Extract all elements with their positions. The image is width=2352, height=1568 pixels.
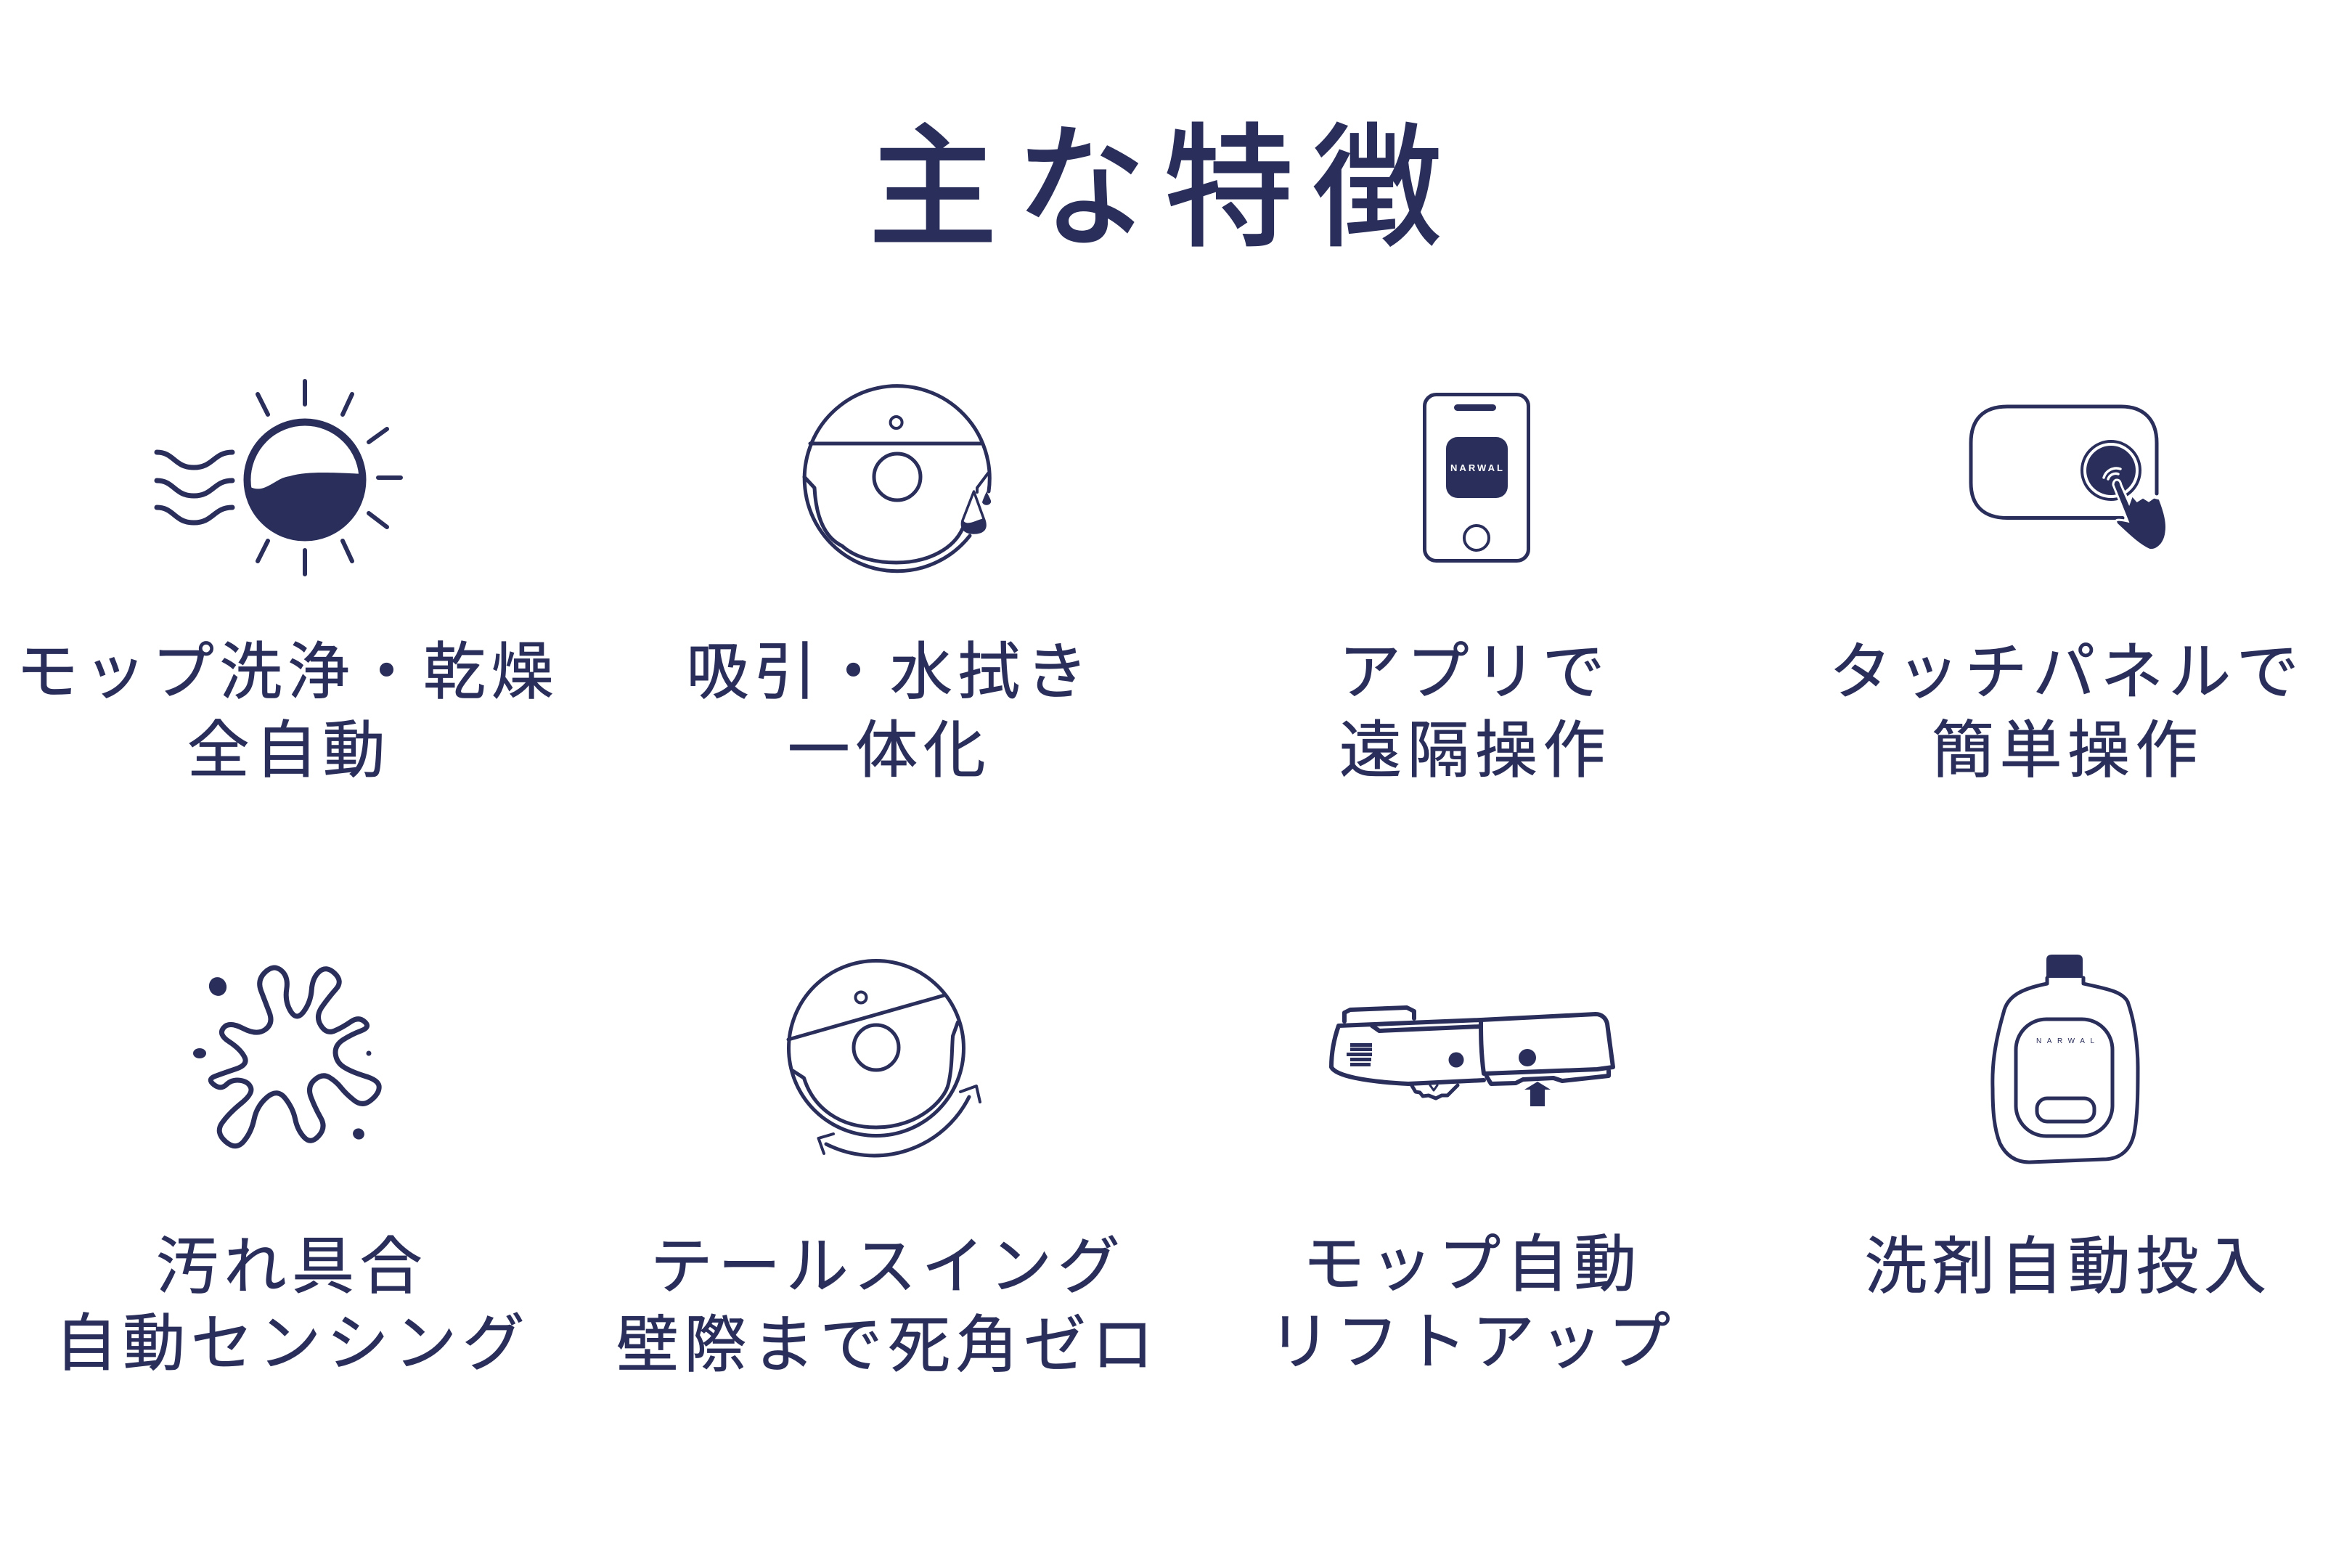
label: app control: アプリで (1339, 637, 1610, 707)
panel: mop lift (1269, 1008, 1675, 1377)
label: mop lift: リフトアップ (1269, 1307, 1675, 1377)
icon: robot with swing arrow (788, 961, 980, 1156)
label: touch panel: 簡単操作 (1932, 716, 2203, 785)
panel: auto detergent (1864, 955, 2272, 1302)
label: mop wash and dry (16, 637, 559, 785)
label: mop wash and dry: 全自動 (187, 716, 391, 785)
label: dirt sensing (55, 1232, 530, 1379)
label: suction and mopping: 一体化 (788, 716, 991, 785)
label: app control (1339, 637, 1611, 785)
icon: detergent bottle: NARWAL (2036, 1037, 2094, 1045)
icon: smartphone with app (1424, 395, 1529, 560)
icon: touch panel with hand (1971, 407, 2167, 550)
label: suction and mopping (687, 637, 1093, 785)
label: suction and mopping: 吸引・水拭き (687, 637, 1093, 707)
panel: dirt sensing (55, 968, 530, 1379)
label: dirt sensing: 汚れ具合 (156, 1232, 428, 1302)
label: tail swing (616, 1232, 1159, 1380)
label: tail swing: 壁際まで死角ゼロ (616, 1310, 1159, 1380)
icon: sun with drying waves (157, 381, 401, 574)
panel: tail swing (616, 961, 1159, 1380)
panel: app control (1339, 395, 1611, 785)
icon: robot side view with lifting mop (1331, 1008, 1613, 1106)
icon: smartphone with app: NARWAL (1450, 462, 1503, 473)
icon: splash (193, 968, 379, 1146)
icon: detergent bottle (1993, 955, 2138, 1162)
title: 主な特徴 (867, 114, 1460, 264)
label: mop wash and dry: モップ洗浄・乾燥 (16, 637, 559, 707)
label: dirt sensing: 自動センシング (55, 1309, 530, 1379)
label: touch panel: タッチパネルで (1829, 637, 2304, 707)
label: touch panel (1829, 637, 2304, 785)
icon: robot with water drop (804, 386, 991, 571)
label: tail swing: テールスイング (650, 1232, 1125, 1302)
panel: mop wash and dry (16, 381, 559, 785)
panel: touch panel (1829, 407, 2304, 785)
label: app control: 遠隔操作 (1339, 716, 1611, 785)
panel: suction and mopping (687, 386, 1093, 785)
label: mop lift (1269, 1230, 1675, 1377)
label: mop lift: モップ自動 (1302, 1230, 1642, 1299)
label: auto detergent: 洗剤自動投入 (1864, 1232, 2272, 1302)
